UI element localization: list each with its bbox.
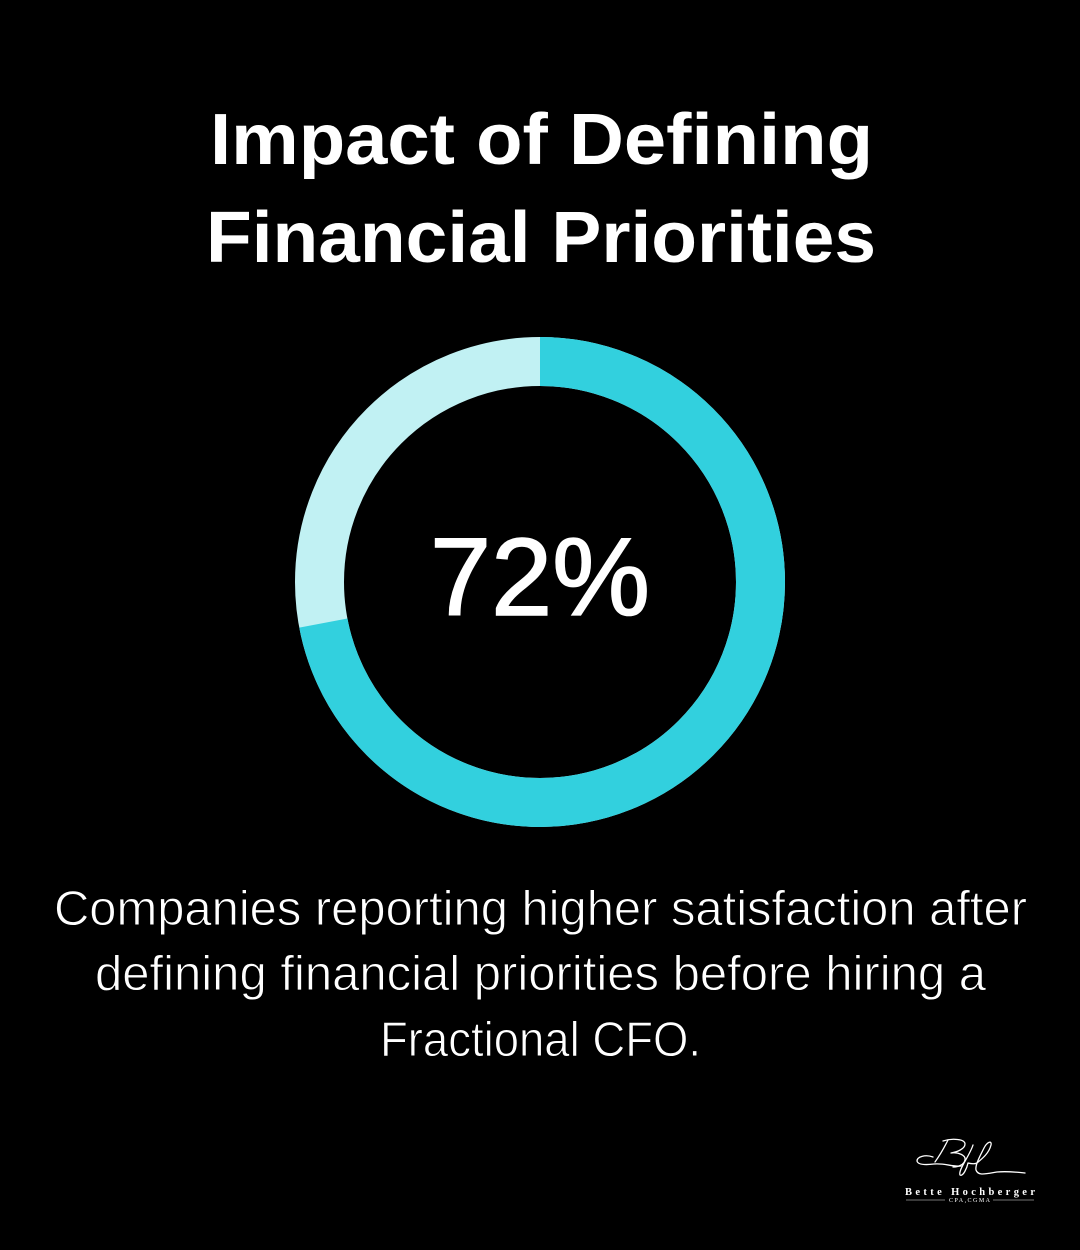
description text: defining financial priorities before hiring a xyxy=(95,947,987,1001)
title: Impact of Defining xyxy=(210,100,873,180)
donut value: 72% xyxy=(430,516,650,639)
logo credentials: CPA,CGMA xyxy=(949,1198,991,1204)
title: Financial Priorities xyxy=(206,198,876,278)
donut chart: 72 percent xyxy=(320,362,760,802)
description text: Fractional CFO. xyxy=(380,1013,701,1067)
logo: Bette Hochberger xyxy=(905,1139,1035,1204)
ring value: 72 percent xyxy=(320,362,760,802)
icon: signature monogram xyxy=(917,1139,1025,1175)
logo rule lines xyxy=(906,1199,1034,1201)
description text xyxy=(54,882,1027,1067)
logo name: Bette Hochberger xyxy=(905,1187,1035,1198)
ring track: remaining 28 percent xyxy=(320,362,760,802)
description text: Companies reporting higher satisfaction after xyxy=(54,882,1027,936)
title xyxy=(206,100,876,278)
